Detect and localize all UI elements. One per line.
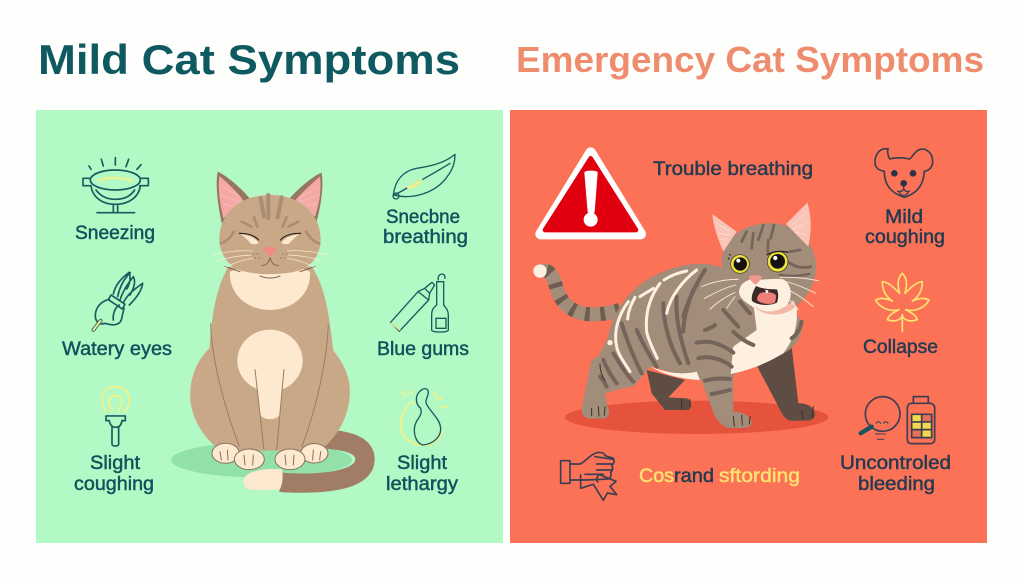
icon: figure for slight lethargy	[401, 389, 446, 445]
label: blue gums: Blue gums	[377, 339, 469, 360]
label: mild coughing	[865, 207, 945, 248]
label: snecbne breathing: Snecbne	[386, 207, 460, 228]
label: slight lethargy: Slight	[397, 453, 448, 474]
icon: leaf for breathing	[393, 154, 455, 199]
label: snecbne breathing	[383, 207, 468, 248]
label: slight coughing: coughing	[74, 474, 154, 495]
label: slight lethargy	[386, 453, 459, 495]
label: watery eyes: Watery eyes	[62, 339, 172, 360]
label: cosrand sftording: rand	[674, 466, 714, 487]
label: cosrand sftording	[639, 466, 800, 487]
label: mild coughing: Mild	[885, 207, 923, 228]
label: slight coughing: Slight	[90, 453, 141, 474]
icon: light bulb for slight coughing	[102, 387, 129, 446]
icon: dog face for mild coughing	[875, 149, 933, 197]
panel: mild symptoms	[36, 110, 503, 543]
label: snecbne breathing: breathing	[383, 227, 468, 248]
icon: bowl for sneezing	[83, 158, 148, 213]
label: collapse: Collapse	[863, 337, 938, 358]
icon: brush for watery eyes	[93, 272, 143, 330]
label: slight coughing	[74, 453, 154, 495]
icon: maple leaf for collapse	[876, 273, 929, 331]
panel: emergency symptoms	[510, 110, 987, 543]
label: uncontroled bleeding: bleeding	[858, 474, 935, 495]
label: slight lethargy: lethargy	[386, 474, 459, 495]
label: cosrand sftording: Cos	[639, 466, 674, 487]
label: cosrand sftording: sftording	[719, 466, 800, 487]
illustration: calm sitting cat	[171, 172, 365, 490]
title: emergency cat symptoms: Emergency Cat Symptoms	[516, 39, 984, 80]
label: uncontroled bleeding: Uncontroled	[840, 453, 951, 474]
icon: hand and paw	[561, 452, 617, 500]
label: mild coughing: coughing	[865, 227, 945, 248]
icon: warning triangle	[541, 153, 641, 234]
title: mild cat symptoms: Mild Cat Symptoms	[38, 36, 460, 83]
label: sneezing: Sneezing	[75, 223, 155, 244]
illustration: distressed tabby cat	[533, 203, 828, 434]
icon: tube and bottle for blue gums	[391, 274, 448, 332]
label: trouble breathing: Trouble breathing	[653, 159, 813, 180]
icon: magnifier and battery for bleeding	[861, 397, 935, 444]
label: uncontroled bleeding	[840, 453, 951, 495]
